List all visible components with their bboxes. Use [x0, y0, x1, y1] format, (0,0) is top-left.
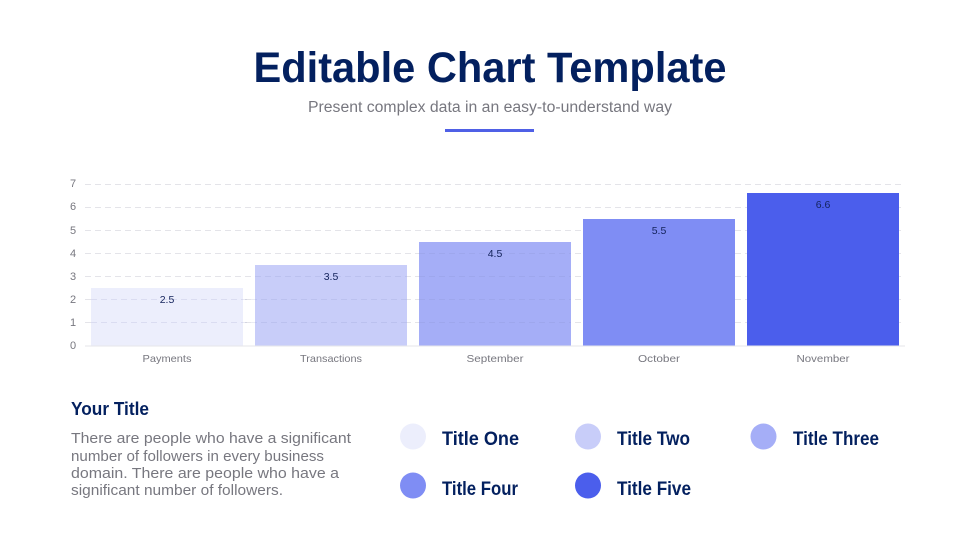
- subtitle: Present complex data in an easy-to-understand way: [308, 99, 672, 116]
- y axis labels: 5: [70, 225, 76, 237]
- bar: October: [583, 219, 735, 346]
- bar: September: [419, 242, 571, 346]
- legend item: Title Four: [400, 472, 519, 500]
- y axis labels: 4: [70, 248, 76, 260]
- accent underline: [445, 129, 534, 132]
- bar chart: [70, 178, 905, 365]
- category labels: September: [466, 353, 524, 365]
- legend item: Title Five: Title Five: [617, 479, 691, 500]
- text block body: There are people who have a significant: [71, 430, 352, 447]
- y axis labels: 2: [70, 294, 76, 306]
- text block body: domain. There are people who have a: [71, 465, 340, 482]
- legend item: Title One: [400, 424, 519, 450]
- category labels: November: [796, 353, 850, 365]
- y axis labels: 6: [70, 201, 76, 213]
- y axis labels: 1: [70, 317, 76, 329]
- text block body: significant number of followers.: [71, 482, 283, 499]
- y axis labels: 3: [70, 271, 76, 283]
- value labels: 2.5: [160, 294, 174, 306]
- bar: Transactions: [255, 265, 407, 346]
- legend: [400, 424, 879, 500]
- y axis labels: [70, 178, 76, 352]
- bar: November: [747, 193, 899, 346]
- text block heading: Your Title: [71, 399, 149, 419]
- title: Editable Chart Template: [254, 44, 726, 92]
- legend item: Title Four: Title Four: [442, 479, 519, 500]
- legend item: Title Five: [575, 472, 691, 500]
- value labels: 4.5: [488, 248, 502, 260]
- value labels: 3.5: [324, 271, 338, 283]
- legend item: Title One: Title One: [442, 429, 519, 450]
- legend item: Title Three: [750, 424, 879, 450]
- legend item: Title Two: Title Two: [617, 429, 690, 450]
- y axis labels: 7: [70, 178, 76, 190]
- value labels: 5.5: [652, 225, 666, 237]
- value labels: 6.6: [816, 199, 830, 211]
- bar: Payments: [91, 288, 243, 346]
- category labels: Transactions: [300, 353, 362, 365]
- value labels: [160, 199, 830, 306]
- text block body: [71, 430, 352, 499]
- category labels: Payments: [142, 353, 192, 365]
- legend item: Title Two: [575, 424, 690, 450]
- text block body: number of followers in every business: [71, 448, 324, 465]
- category labels: October: [638, 353, 681, 365]
- legend item: Title Three: Title Three: [793, 429, 879, 450]
- y axis labels: 0: [70, 340, 76, 352]
- category labels: [142, 353, 850, 365]
